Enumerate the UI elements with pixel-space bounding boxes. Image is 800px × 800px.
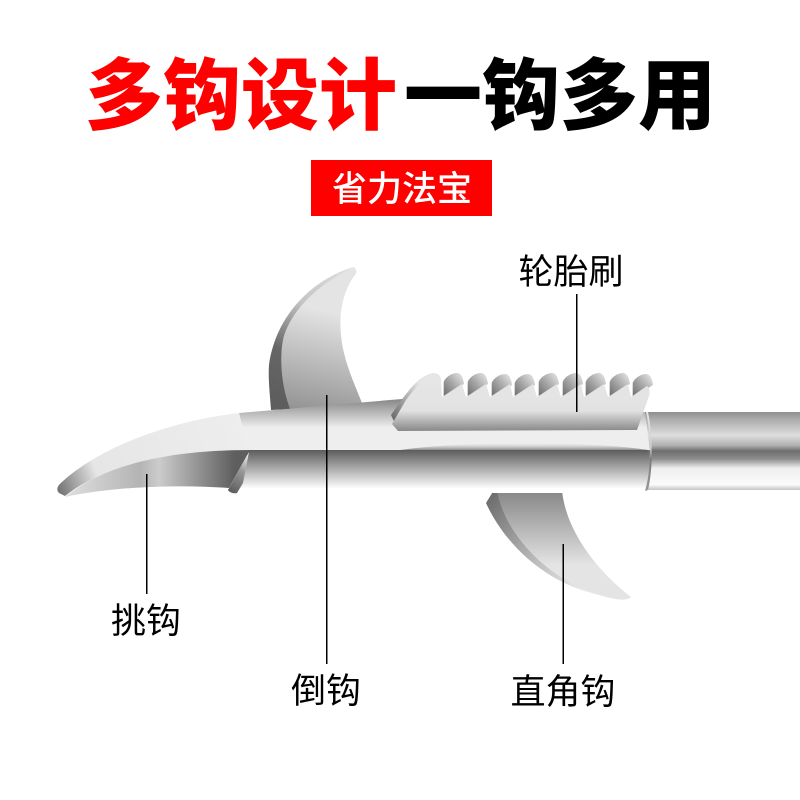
barb hook (269, 267, 362, 411)
label: tire brush: 轮胎刷 (518, 253, 624, 292)
tool body upper half (239, 399, 650, 450)
title: red part: 多钩设计 (85, 52, 397, 140)
leader line: barb hook (326, 395, 328, 664)
title: black part: 一钩多用 (404, 52, 716, 140)
title (85, 52, 716, 140)
pick hook (57, 413, 250, 497)
brush teeth (444, 373, 653, 398)
shaft rod (645, 412, 800, 490)
leader line: tire brush (576, 294, 578, 412)
leader line: right-angle hook (562, 544, 564, 664)
tool body shading (400, 443, 648, 450)
collar edge (645, 412, 652, 491)
label: barb hook: 倒钩 (291, 672, 361, 711)
right-angle hook (486, 490, 631, 600)
subtitle badge: 省力法宝 (332, 170, 472, 209)
leader line: pick hook (146, 474, 148, 594)
tire brush (391, 373, 653, 431)
label: pick hook: 挑钩 (111, 602, 181, 641)
illustration: multi-hook tool (57, 267, 800, 600)
tool body lower half (240, 450, 649, 493)
subtitle badge (311, 160, 492, 216)
label: right-angle hook: 直角钩 (510, 673, 616, 712)
